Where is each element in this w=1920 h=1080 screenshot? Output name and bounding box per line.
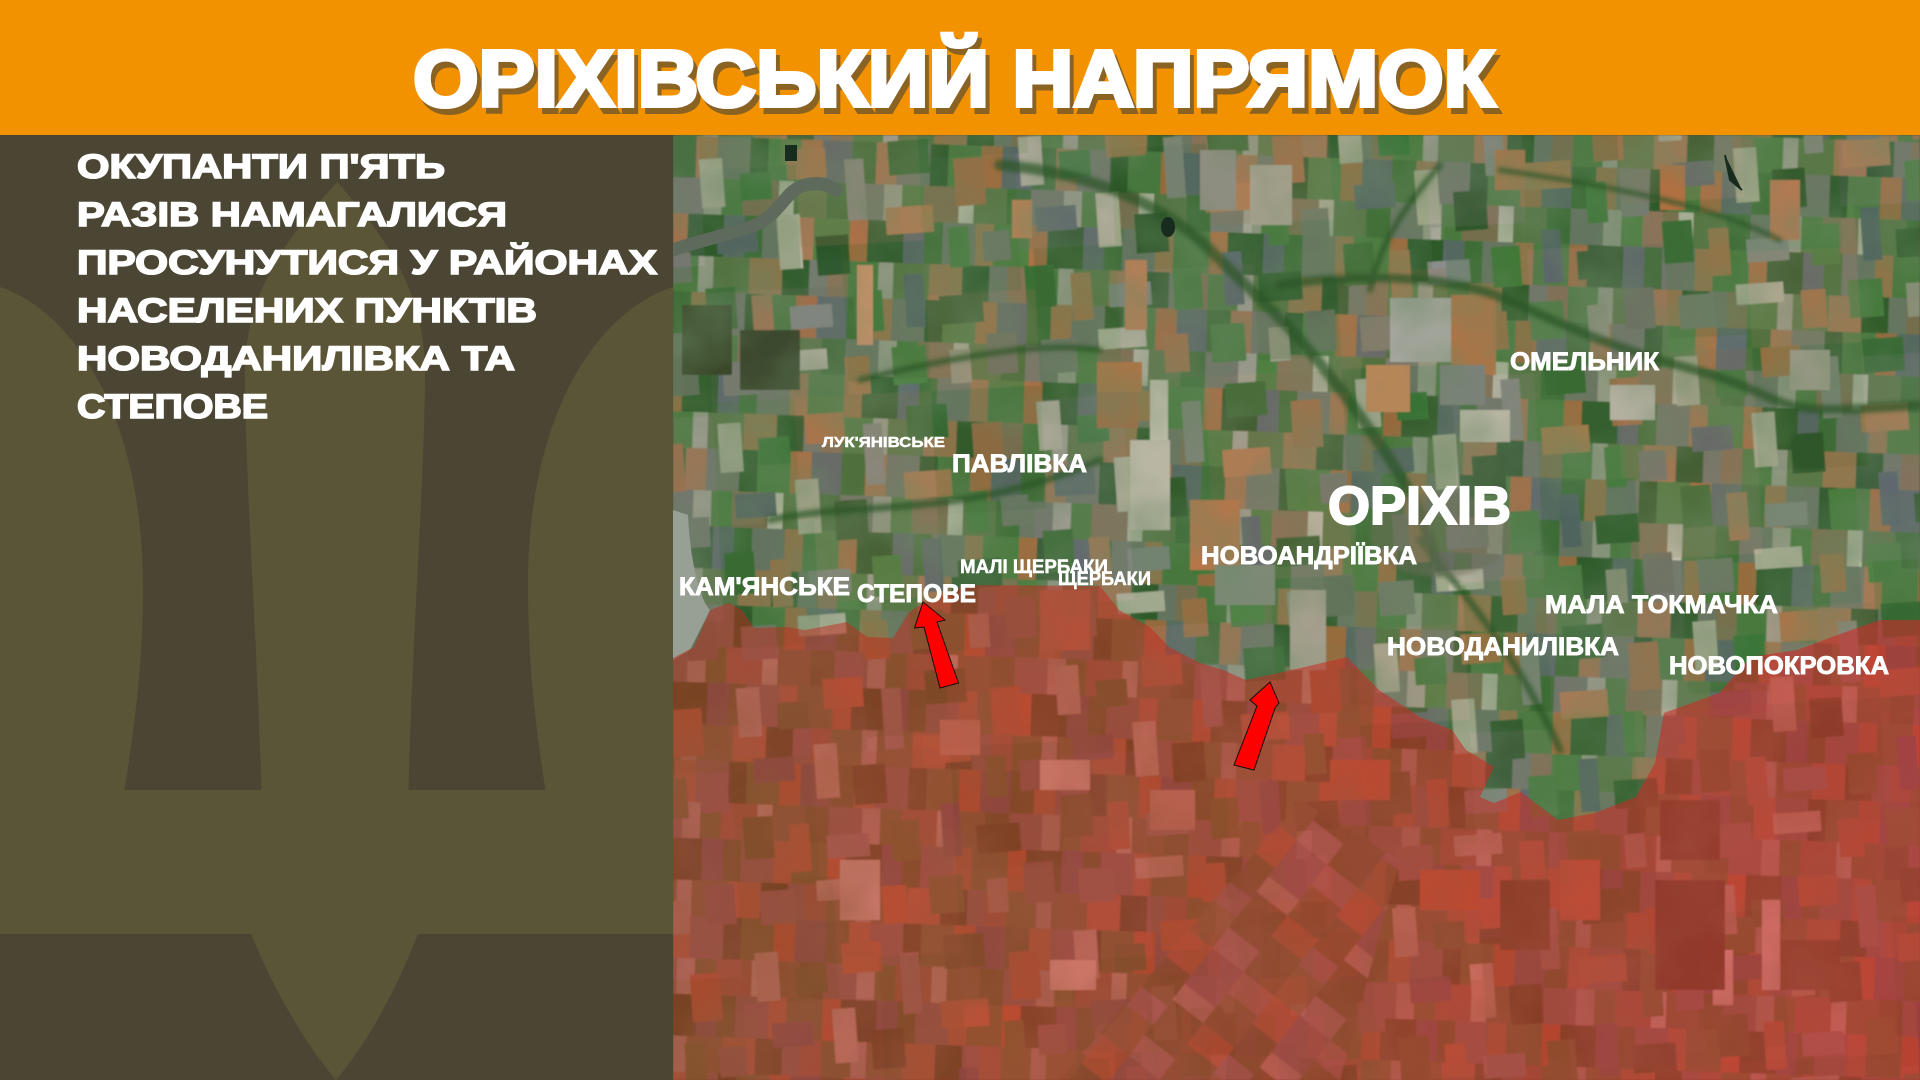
- label: Novopokrovka: НОВОПОКРОВКА: [1669, 652, 1889, 680]
- text block: summary: РАЗІВ НАМАГАЛИСЯ: [77, 196, 507, 234]
- text block: summary: НАСЕЛЕНИХ ПУНКТІВ: [77, 292, 537, 330]
- label: Pavlivka: ПАВЛІВКА: [952, 450, 1087, 478]
- town: Orikhiv built-up area: [1370, 493, 1510, 577]
- map corridors: rivers and tree lines: [770, 165, 1917, 750]
- map texture: darkening mottle: [673, 135, 1920, 1080]
- text block: summary: [77, 148, 657, 426]
- arrow: Stepove direction: [914, 602, 958, 688]
- panel: left background: [0, 135, 673, 1080]
- label: Novoandriivka: НОВОАНДРІЇВКА: [1201, 542, 1417, 570]
- map labels: [679, 348, 1889, 680]
- ponds: [786, 146, 1742, 236]
- reservoir shore at left edge: [673, 510, 710, 660]
- map field mosaic: [673, 135, 1920, 1080]
- title: ОРІХІВСЬКИЙ НАПРЯМОК: [413, 33, 1495, 123]
- label: Novodanylivka: НОВОДАНИЛІВКА: [1387, 633, 1619, 661]
- text block: summary: ОКУПАНТИ П'ЯТЬ: [77, 148, 445, 186]
- label: Mali Shcherbaky: МАЛІ ЩЕРБАКИ: [960, 557, 1108, 578]
- occupied territory overlay: [673, 585, 1920, 1080]
- label: Omelnyk: ОМЕЛЬНИК: [1510, 348, 1660, 376]
- arrow: Novodanylivka direction: [1234, 682, 1279, 770]
- label: Mala Tokmachka: МАЛА ТОКМАЧКА: [1545, 591, 1778, 619]
- text block: summary: ПРОСУНУТИСЯ У РАЙОНАХ: [77, 242, 657, 282]
- label: Orikhiv: ОРІХІВ: [1328, 476, 1511, 536]
- label: Stepove: СТЕПОВЕ: [857, 580, 976, 608]
- text block: summary: НОВОДАНИЛІВКА ТА: [77, 340, 515, 378]
- lake: [673, 184, 836, 250]
- text block: summary: СТЕПОВЕ: [77, 388, 268, 426]
- label: Shcherbaky: ЩЕРБАКИ: [1058, 569, 1151, 590]
- label: Kamianske: КАМ'ЯНСЬКЕ: [679, 573, 850, 601]
- satellite map: [673, 135, 1920, 1080]
- header bar: [0, 0, 1920, 135]
- label: Lukianivske: ЛУК'ЯНІВСЬКЕ: [822, 434, 945, 451]
- icon: trident emblem: [0, 182, 673, 1080]
